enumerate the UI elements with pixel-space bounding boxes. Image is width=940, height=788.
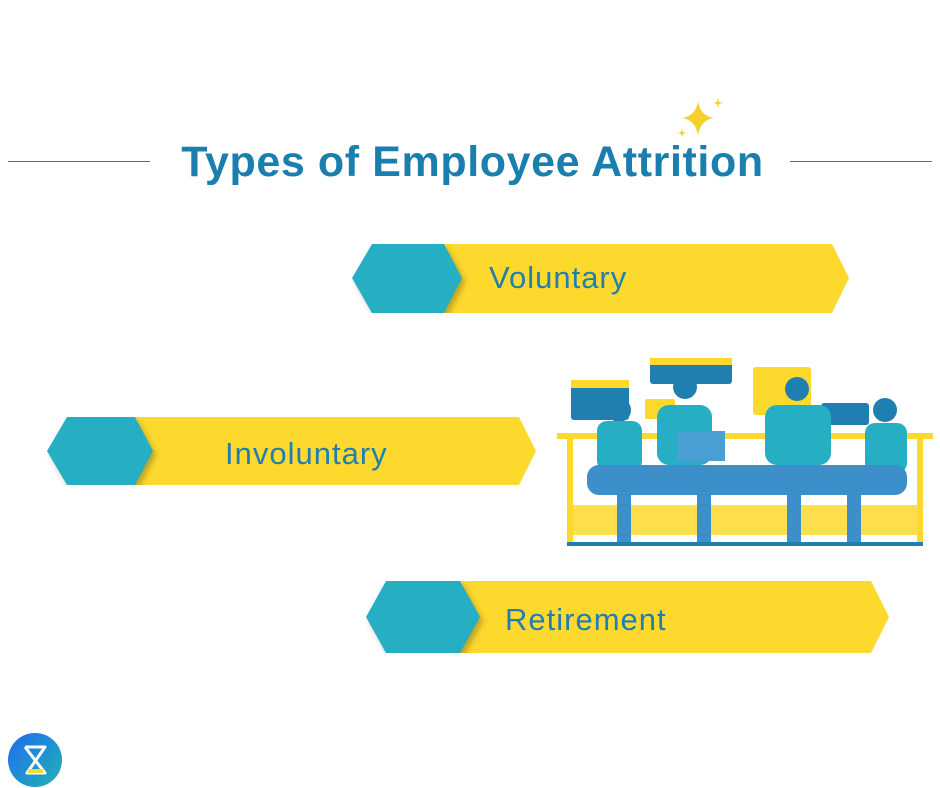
title: Types of Employee Attrition [181, 138, 764, 186]
banner: Involuntary: Involuntary [225, 436, 388, 471]
banner: Voluntary [352, 244, 849, 313]
icon: logo [8, 733, 62, 787]
banner: Retirement [366, 581, 889, 653]
banner: Involuntary [47, 417, 536, 485]
illustration: team meeting [557, 358, 933, 546]
banner: Retirement: Retirement [505, 602, 667, 637]
icon: sparkles [678, 98, 723, 137]
banner: Voluntary: Voluntary [489, 260, 627, 295]
